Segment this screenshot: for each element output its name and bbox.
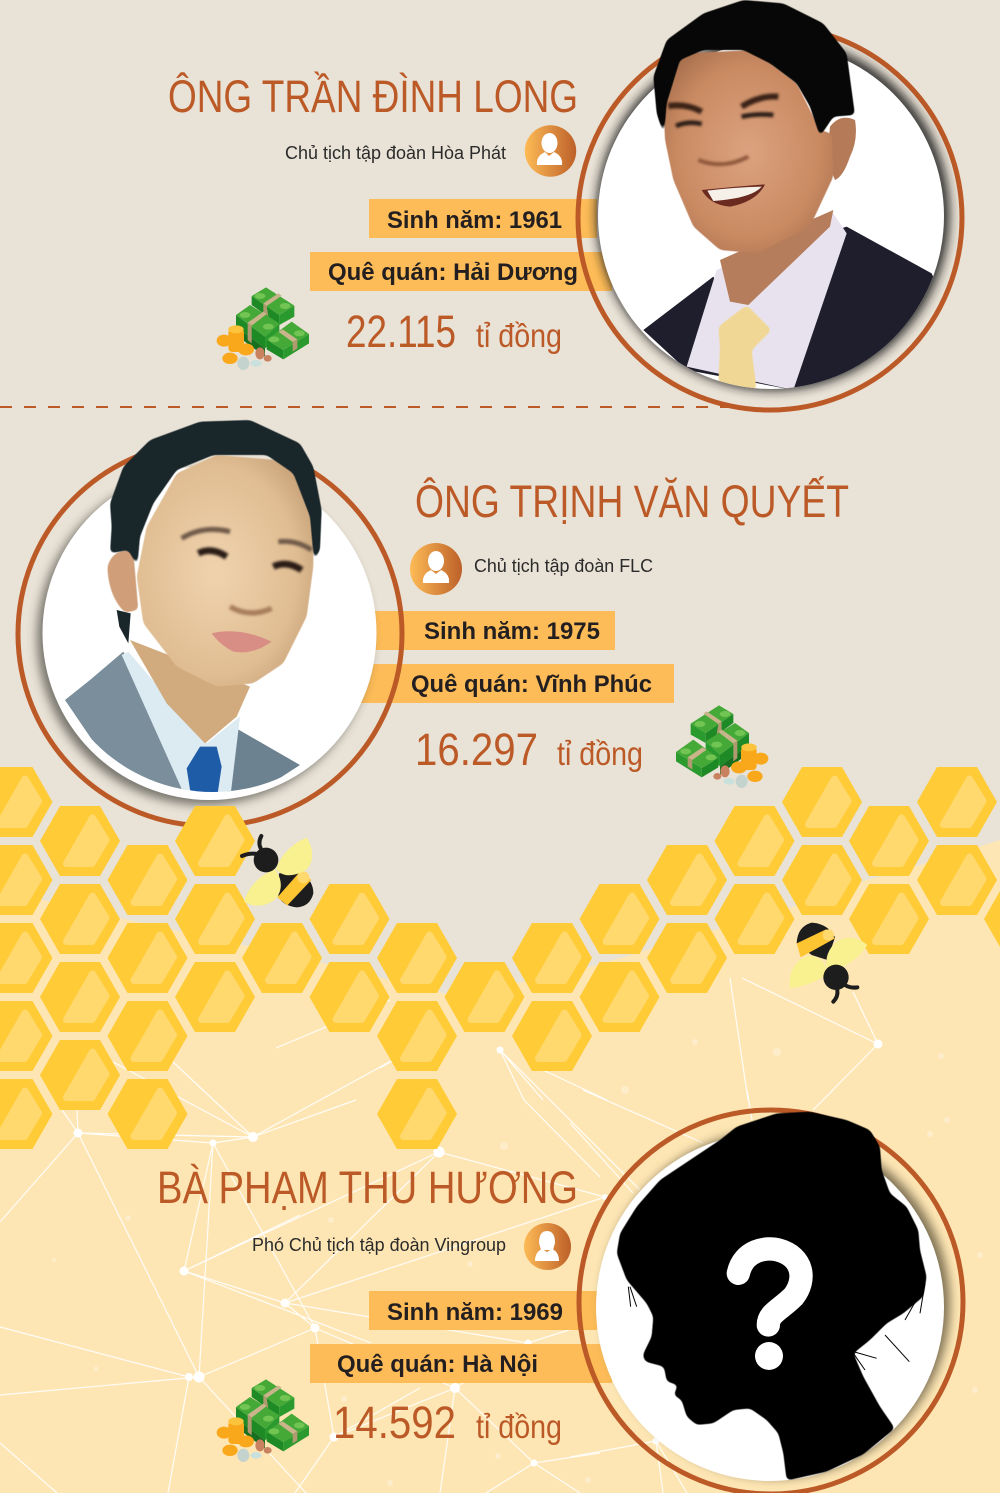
hair 2 <box>110 420 322 567</box>
bar: birth year 2 <box>372 611 615 650</box>
shadow 3 <box>602 1130 950 1478</box>
panel: Trịnh Văn Quyết <box>18 420 849 826</box>
figure: wealth 2: tỉ đồng <box>557 735 643 772</box>
figure: wealth 3: tỉ đồng <box>476 1408 562 1445</box>
text: role 3: Phó Chủ tịch tập đoàn Vingroup <box>252 1235 506 1255</box>
bar: hometown 1: Quê quán: Hải Dương <box>328 259 578 286</box>
title: name 3: BÀ PHẠM THU HƯƠNG <box>157 1162 578 1213</box>
portrait 3 <box>579 1110 963 1493</box>
tie 1 <box>718 305 772 390</box>
honeycomb <box>0 767 1000 1149</box>
ring 2 <box>18 442 402 826</box>
shirt 2 <box>122 652 240 800</box>
figure: wealth 3 <box>333 1397 562 1448</box>
jacket 1 <box>643 227 943 400</box>
icon: person 3 <box>524 1223 571 1270</box>
icon: money 2 <box>676 705 768 788</box>
neck 2 <box>130 640 250 743</box>
bar: birth year 3: Sinh năm: 1969 <box>387 1299 563 1326</box>
panel: Phạm Thu Hương <box>157 1110 963 1493</box>
disc 3 <box>596 1133 944 1481</box>
icon: money 3 <box>217 1379 309 1462</box>
ear 1 <box>827 118 856 180</box>
bar: hometown 2: Quê quán: Vĩnh Phúc <box>411 671 652 698</box>
bar: hometown 2 <box>355 664 674 703</box>
bar: birth year 2: Sinh năm: 1975 <box>424 618 600 645</box>
bar: birth year 3 <box>369 1291 597 1330</box>
text: role 1: Chủ tịch tập đoàn Hòa Phát <box>285 143 506 163</box>
bar: hometown 3 <box>310 1344 612 1383</box>
neck 1 <box>720 210 833 305</box>
network lines pattern <box>0 978 878 1493</box>
figure: wealth 1: tỉ đồng <box>476 317 562 354</box>
mouth 1 <box>702 184 765 207</box>
icon: bee right <box>789 923 867 1002</box>
tie 2 <box>186 746 222 792</box>
hair 1 <box>653 0 855 137</box>
bar: hometown 1 <box>310 252 612 291</box>
bar: birth year 1 <box>369 199 597 238</box>
figure: wealth 1: 22.115 <box>346 306 456 357</box>
title: name 2: ÔNG TRỊNH VĂN QUYẾT <box>415 476 849 527</box>
bar: hometown 3: Quê quán: Hà Nội <box>337 1351 538 1378</box>
silhouette <box>617 1112 927 1481</box>
bar: birth year 1: Sinh năm: 1961 <box>387 207 562 234</box>
face 2 <box>137 455 313 687</box>
icon: person 2 <box>410 543 462 595</box>
panel: Trần Đình Long <box>168 0 962 410</box>
ring 1 <box>578 26 962 410</box>
background: lower cream area <box>0 840 1000 1493</box>
face 1 <box>663 50 833 253</box>
figure: wealth 3: 14.592 <box>333 1397 456 1448</box>
title: name 1: ÔNG TRẦN ĐÌNH LONG <box>168 71 578 122</box>
portrait 2 <box>18 420 402 826</box>
lips 2 <box>212 631 272 652</box>
shadow 2 <box>37 471 371 805</box>
icon: money 1 <box>217 287 309 370</box>
figure: wealth 2 <box>415 724 643 775</box>
disc 1 <box>598 43 944 389</box>
divider dashed line <box>0 406 745 408</box>
disc 2 <box>42 466 376 800</box>
portrait 1 <box>578 0 962 410</box>
ear 2 <box>107 551 138 613</box>
icon: bee left <box>242 836 313 907</box>
shadow 1 <box>596 37 950 391</box>
text: role 2: Chủ tịch tập đoàn FLC <box>474 556 653 576</box>
ring 3 <box>579 1110 963 1493</box>
brows and eyes 2 <box>182 529 312 613</box>
shirt 1 <box>687 213 847 390</box>
network nodes <box>52 1039 983 1486</box>
figure: wealth 1 <box>346 306 562 357</box>
icon: person 1 <box>525 125 576 177</box>
suit 2 <box>65 652 190 800</box>
question mark <box>738 1249 801 1325</box>
brows and eyes 1 <box>668 96 778 164</box>
figure: wealth 2: 16.297 <box>415 724 538 775</box>
